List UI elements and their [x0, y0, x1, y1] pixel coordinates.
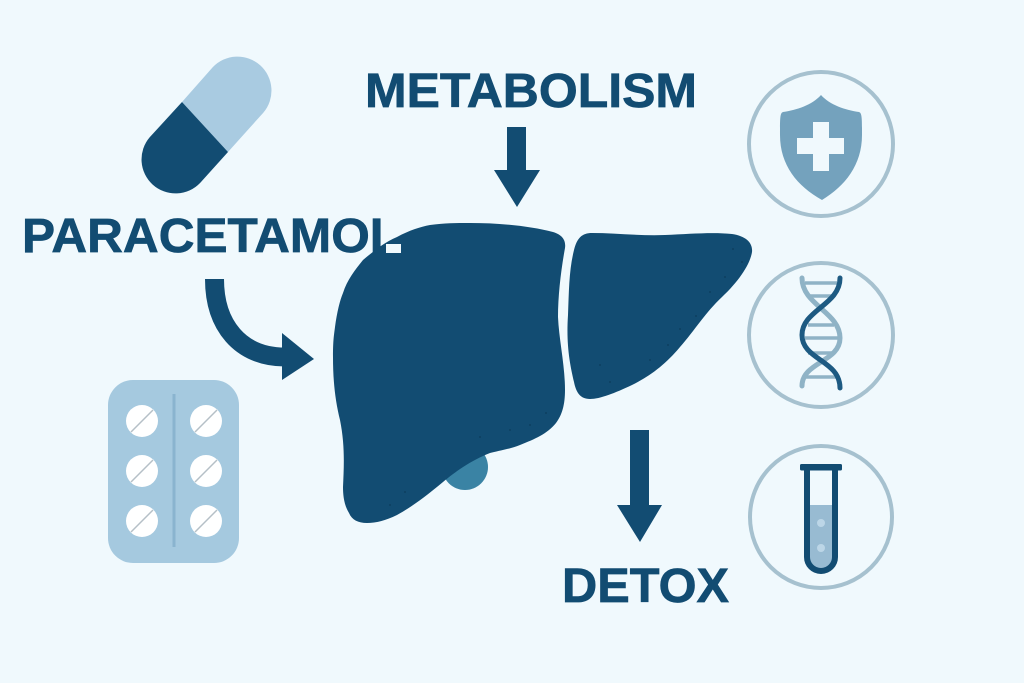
icon: shield in circle — [749, 72, 893, 216]
liver texture dots — [389, 248, 743, 506]
icon: DNA in circle — [749, 263, 893, 407]
heading: paracetamol: PARACETAMOL — [22, 210, 400, 263]
icon: test tube in circle — [750, 446, 892, 588]
liver: left lobe — [333, 223, 565, 523]
heading: detox: DETOX — [562, 560, 729, 613]
arrow: paracetamol to liver — [214, 279, 314, 380]
letter L foot cut-out — [386, 244, 401, 253]
arrow: metabolism to liver — [494, 127, 540, 207]
liver: right lobe — [567, 233, 752, 399]
icon: capsule — [142, 57, 271, 193]
icon: blister pack — [108, 380, 239, 563]
heading: metabolism: METABOLISM — [365, 65, 697, 118]
icon: gallbladder — [442, 444, 488, 490]
arrow: liver to detox — [617, 430, 662, 542]
